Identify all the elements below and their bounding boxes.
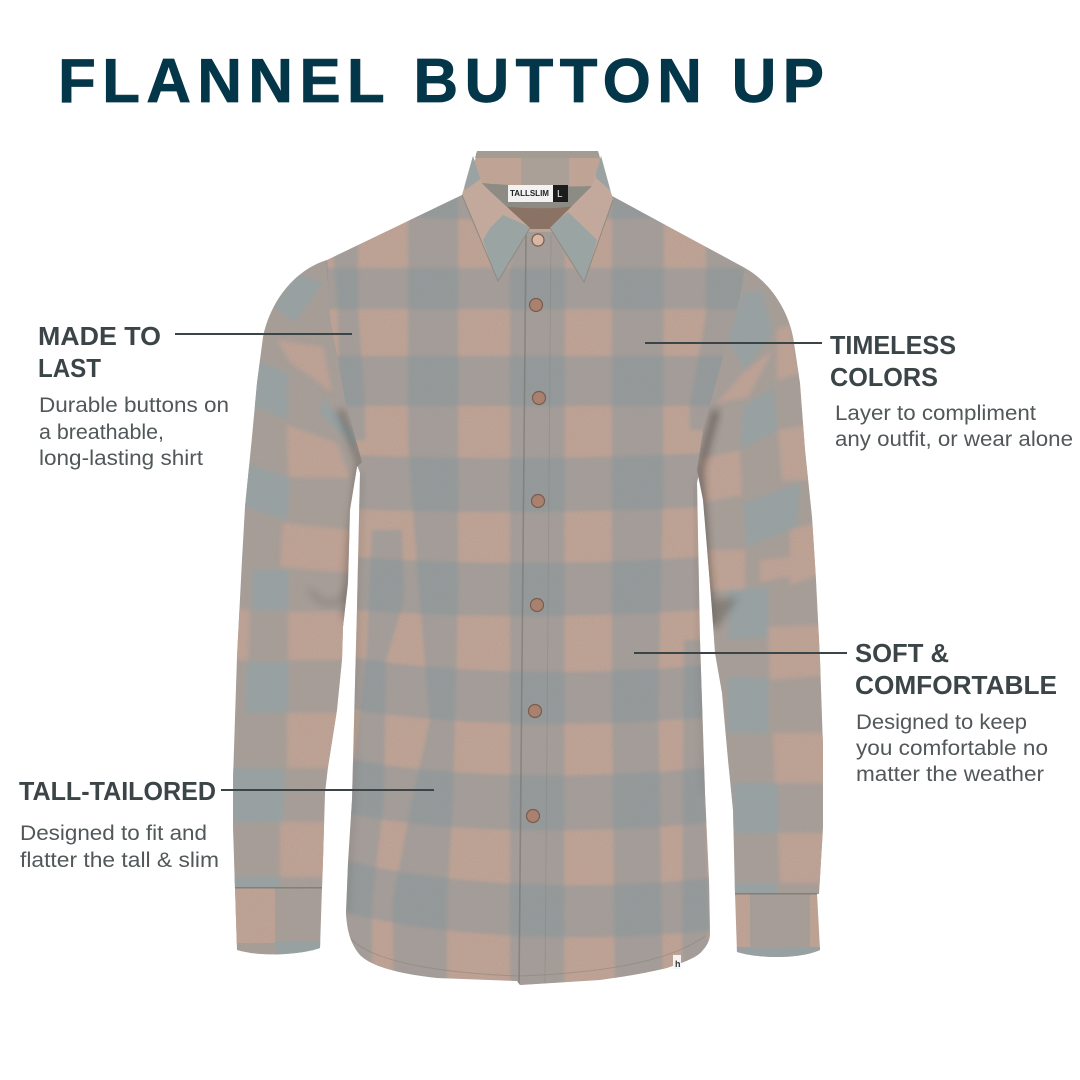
elbow fold: [310, 590, 350, 603]
shoulder seam: [326, 260, 328, 286]
callout: soft and comfortable: matter the weather: [856, 763, 1044, 786]
callout: soft and comfortable: [634, 638, 1057, 786]
armpit fold shadow: [340, 410, 360, 620]
side shading: [346, 473, 360, 913]
callout: soft and comfortable: you comfortable no: [856, 737, 1048, 760]
collar edges: [462, 195, 613, 282]
right sleeve: [697, 268, 823, 894]
right collar leaf: [550, 156, 613, 280]
neck label: [508, 185, 568, 202]
neck label: TALLSLIM: [510, 189, 549, 198]
callout: timeless colors: any outfit, or wear alone: [835, 428, 1073, 451]
callout: soft and comfortable: COMFORTABLE: [855, 670, 1057, 700]
neck label: L: [557, 189, 563, 200]
elbow fold: [712, 598, 738, 630]
title: FLANNEL BUTTON UP: [58, 47, 824, 116]
callout: tall-tailored: Designed to fit and: [20, 822, 207, 845]
callout: soft and comfortable: Designed to keep: [856, 711, 1027, 734]
right cuff: [735, 893, 820, 957]
collar interior: [475, 151, 601, 232]
callout: timeless colors: COLORS: [830, 362, 938, 392]
left collar leaf: [462, 156, 530, 280]
horizontal bands: [320, 190, 750, 937]
callout: made to last: MADE TO: [38, 321, 161, 351]
texture: [328, 158, 708, 982]
hem tag: h: [675, 959, 680, 969]
texture: [237, 344, 348, 876]
shirt: [225, 150, 835, 990]
hem tag: [673, 955, 681, 969]
callout: timeless colors: [645, 330, 1073, 451]
hem stitch: [350, 936, 705, 976]
callout: made to last: a breathable,: [39, 421, 164, 444]
left sleeve: [233, 260, 362, 889]
callout: made to last: LAST: [38, 353, 101, 383]
callout: timeless colors: Layer to compliment: [835, 402, 1036, 425]
buttons: [526, 234, 546, 822]
vertical stripes: [328, 190, 750, 990]
callout: tall-tailored: flatter the tall & slim: [20, 849, 219, 872]
callout: tall-tailored: [19, 776, 434, 872]
callout: timeless colors: TIMELESS: [830, 330, 956, 360]
shirt body: [320, 150, 750, 990]
callout: made to last: Durable buttons on: [39, 394, 229, 417]
texture: [704, 328, 823, 882]
armpit fold shadow: [700, 410, 716, 625]
callout: made to last: [38, 321, 352, 470]
left cuff: [235, 887, 322, 954]
placket: [519, 235, 526, 985]
callout: soft and comfortable: SOFT &: [855, 638, 949, 668]
callout: tall-tailored: TALL-TAILORED: [19, 776, 216, 806]
callout: made to last: long-lasting shirt: [39, 447, 203, 470]
